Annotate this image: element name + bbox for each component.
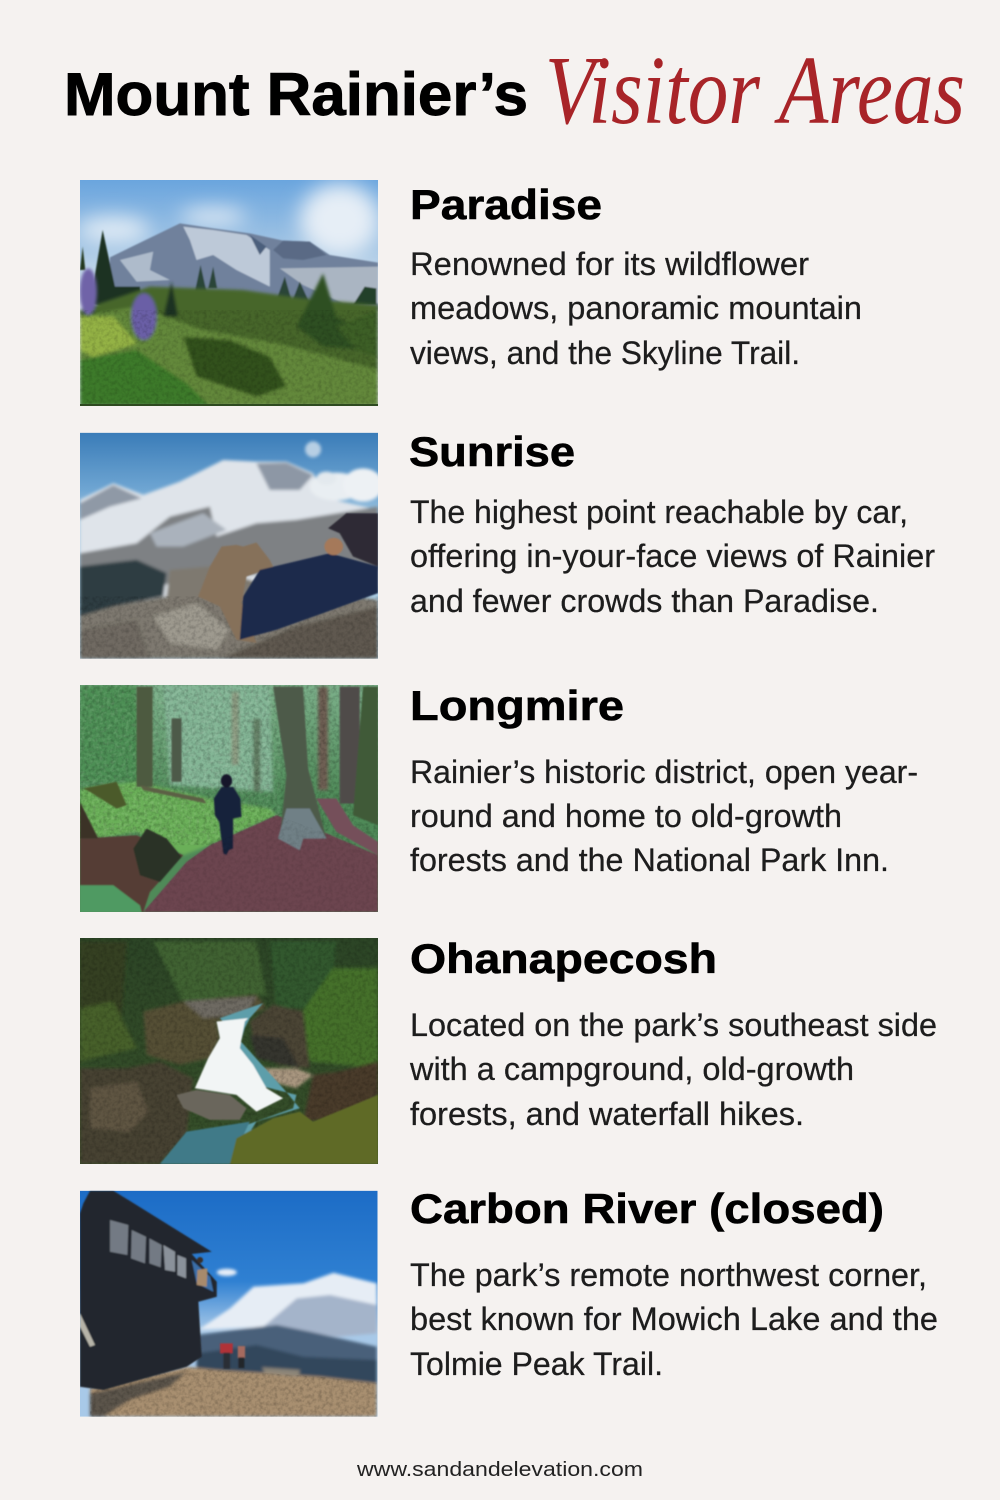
panel: Paradise (77, 180, 862, 406)
description: Sunrise: and fewer crowds than Paradise. (410, 583, 879, 619)
heading: Longmire: Longmire (410, 682, 624, 729)
photo: Ohanapecosh waterfall in forest (80, 938, 378, 1164)
photo: Sunrise snowy mountain and resting hiker (80, 432, 378, 659)
description: Ohanapecosh: Located on the park’s southeast side (410, 1007, 937, 1043)
photo: fire lookout and distant mountain (80, 1190, 378, 1417)
description: Longmire: forests and the National Park Inn. (410, 842, 889, 878)
heading: Sunrise: Sunrise (409, 428, 575, 475)
description: Ohanapecosh: forests, and waterfall hikes. (410, 1096, 804, 1132)
description: Paradise: Renowned for its wildflower (410, 246, 809, 282)
description: Sunrise: offering in-your-face views of Rainier (410, 538, 935, 574)
description: Paradise: views, and the Skyline Trail. (410, 335, 800, 371)
description: Sunrise (410, 494, 935, 619)
description: Carbon River: The park’s remote northwest corner, (410, 1257, 927, 1293)
panel: Longmire (80, 682, 918, 912)
title: Mount Rainier’s (64, 61, 528, 128)
panel: Carbon River (80, 1185, 938, 1417)
heading: Ohanapecosh: Ohanapecosh (410, 935, 717, 982)
panel: Sunrise (80, 428, 935, 659)
description: Carbon River (410, 1257, 938, 1382)
description: Paradise (410, 246, 862, 371)
footer website: www.sandandelevation.com (356, 1459, 643, 1481)
panel: Ohanapecosh (80, 935, 937, 1164)
photo: Paradise wildflower meadow and mountain (80, 180, 378, 406)
description: Longmire (410, 754, 918, 878)
description: Carbon River: best known for Mowich Lake and the (410, 1301, 938, 1337)
description: Ohanapecosh (409, 1007, 937, 1132)
description: Longmire: Rainier’s historic district, open year- (410, 754, 918, 790)
description: Longmire: round and home to old-growth (410, 798, 842, 834)
heading: Paradise: Paradise (410, 181, 602, 228)
photo: Longmire forest trail with hiker (80, 685, 378, 912)
description: Carbon River: Tolmie Peak Trail. (410, 1346, 663, 1382)
description: Ohanapecosh: with a campground, old-growth (409, 1051, 854, 1087)
description: Paradise: meadows, panoramic mountain (410, 290, 862, 326)
description: Sunrise: The highest point reachable by car, (410, 494, 908, 530)
title (64, 37, 965, 145)
heading: Carbon River (closed): Carbon River (closed) (410, 1185, 884, 1232)
